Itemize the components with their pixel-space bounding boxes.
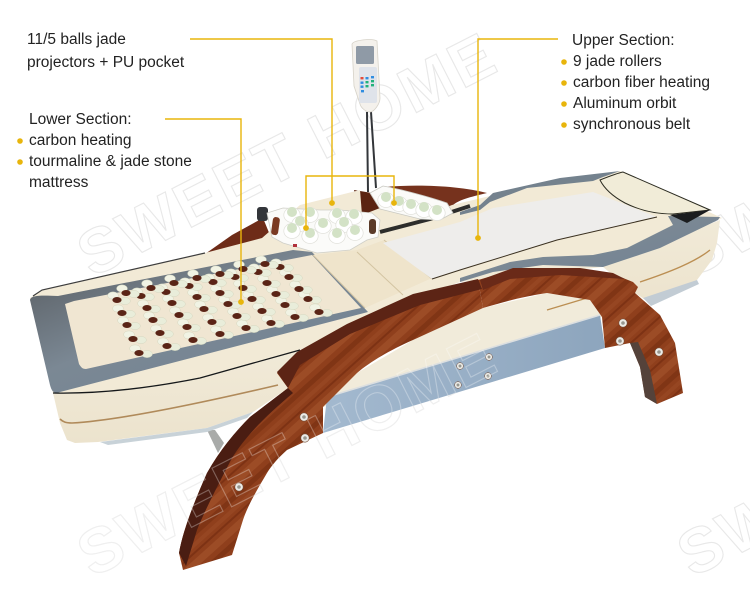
text block: upper section: Upper Section:: [572, 32, 675, 49]
upper white panel: [383, 192, 657, 279]
far arch: [205, 186, 487, 254]
callout leader: rollers bracket: [304, 176, 396, 230]
text block: lower section: mattress: [29, 174, 89, 191]
cream area under arch: [323, 293, 602, 407]
watermark overlay on bed: SWEET HOME: [67, 319, 509, 590]
callout leader: upper section: [476, 39, 558, 240]
far edge line: [33, 253, 205, 296]
center cream section: [313, 240, 432, 308]
text block: lower section: carbon heating: [29, 132, 132, 149]
panel bolts: [455, 354, 492, 388]
far end body: [603, 220, 720, 305]
watermark: SWEET HOME: SWEET HOME: [67, 319, 509, 590]
jade stone mattress grid: [108, 256, 332, 358]
bed body side: [53, 350, 300, 443]
controller body: [352, 40, 380, 112]
remote controller: [352, 40, 380, 112]
callout leader: projectors: [190, 39, 334, 205]
text block: upper section: [561, 32, 710, 133]
upper near grey band: [460, 216, 720, 282]
upper far grey band: [460, 171, 620, 215]
metal leg: [207, 430, 224, 453]
remote controller cable: [367, 112, 376, 192]
watermark: SWEET HOME: SWEET HOME: [67, 19, 509, 290]
massage bed: [30, 171, 722, 570]
screen: [356, 46, 374, 64]
front arch: [179, 268, 683, 570]
lower grey mat: [30, 250, 368, 393]
near edge black line: [53, 350, 300, 393]
text block: upper section: Aluminum orbit: [573, 95, 677, 112]
flap shadow: [670, 210, 710, 223]
top deck cream: [30, 171, 722, 393]
gold stripe: [60, 385, 278, 423]
text block: lower section: [17, 111, 192, 191]
text block: lower section: Lower Section:: [29, 111, 132, 128]
text block: upper section: 9 jade rollers: [573, 53, 662, 70]
bottom base strip: [100, 412, 253, 445]
text block: projectors: [27, 31, 185, 71]
dark far rail: [380, 206, 470, 232]
arch bolts: [300, 413, 308, 421]
callout leader: lower section: [165, 119, 243, 304]
keypad panel: [359, 67, 377, 103]
nine roller panel: [370, 186, 453, 220]
text block: projectors: projectors + PU pocket: [27, 54, 185, 71]
arch dark top edge: [277, 279, 482, 388]
head flap: [600, 172, 710, 214]
text block: upper section: synchronous belt: [573, 116, 691, 133]
keys: [360, 76, 374, 92]
jade projector panel: [267, 207, 380, 253]
side rail blue panel: [323, 315, 605, 433]
text block: projectors: 11/5 balls jade: [27, 31, 126, 48]
roller knob: [257, 207, 268, 221]
text block: lower section: tourmaline & jade stone: [29, 153, 192, 170]
lower cream pad: [65, 255, 361, 369]
far foot inner edge: [630, 342, 657, 404]
arch dark outer edge: [179, 388, 293, 566]
far end base strip: [643, 280, 699, 306]
text block: upper section: carbon fiber heating: [573, 74, 710, 91]
